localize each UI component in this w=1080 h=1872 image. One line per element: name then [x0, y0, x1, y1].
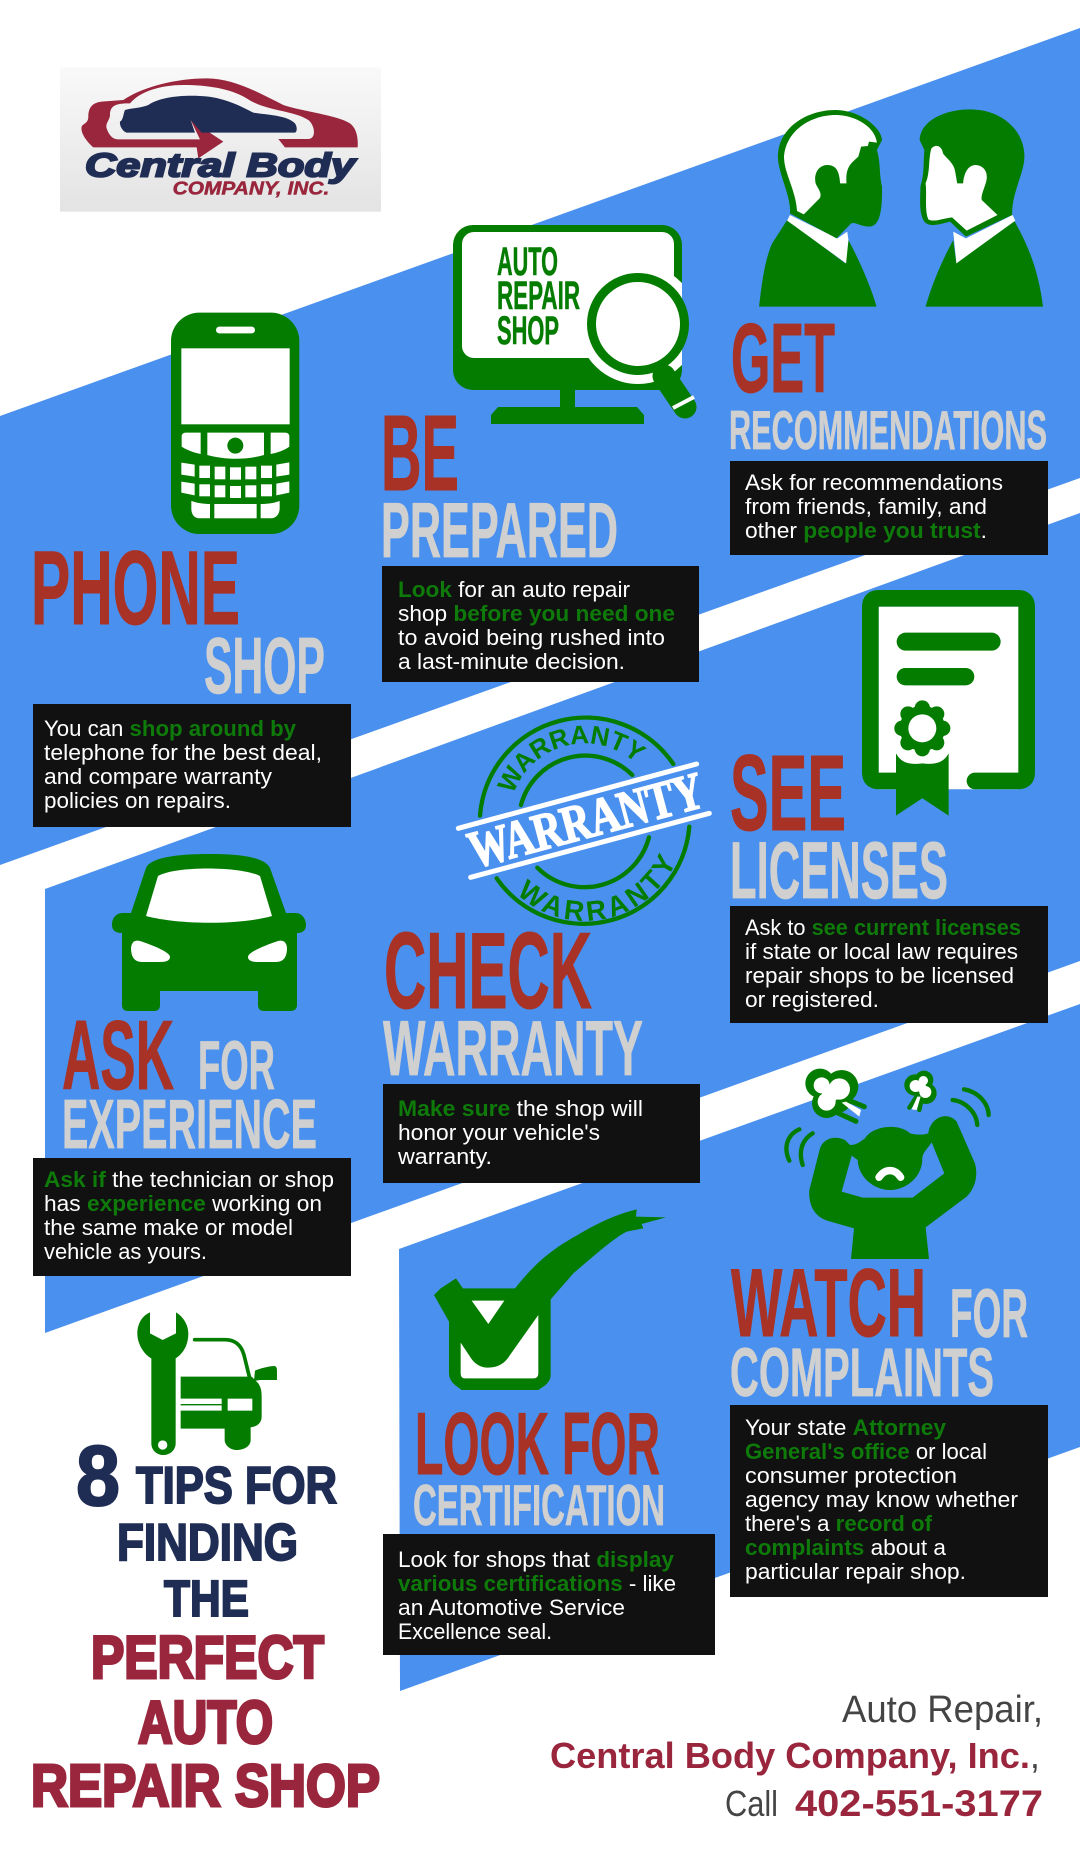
text box: Look for Certification	[383, 1534, 715, 1655]
contact footer	[550, 1689, 1043, 1824]
text box: Watch for Complaints: complaints about a	[745, 1535, 947, 1560]
heading: Ask for Experience: FOR	[198, 1027, 275, 1104]
heading: See Licenses: SEE	[730, 733, 846, 853]
heading: Check Warranty: WARRANTY	[383, 1004, 643, 1092]
text box: Watch for Complaints: General's office or local	[745, 1439, 987, 1464]
text box: Get Recommendations	[730, 461, 1048, 555]
text box: Phone Shop: policies on repairs.	[44, 788, 231, 813]
title: 8 tips for finding the perfect auto repair shop: REPAIR SHOP	[31, 1753, 380, 1819]
text box: Get Recommendations: from friends, family, and	[745, 494, 987, 519]
heading: See Licenses	[730, 733, 948, 916]
title: 8 tips for finding the perfect auto repair shop: TIPS FOR	[136, 1457, 337, 1515]
title: 8 tips for finding the perfect auto repair shop: THE	[164, 1570, 249, 1627]
text box: See Licenses: or registered.	[745, 987, 879, 1012]
title: 8 tips for finding the perfect auto repair shop: PERFECT	[91, 1624, 324, 1691]
heading: Look for Certification	[413, 1394, 665, 1538]
icon: check box	[434, 1209, 666, 1390]
icon: license certificate	[870, 598, 1027, 816]
text box: Ask for Experience: the same make or model	[44, 1215, 293, 1240]
text box: See Licenses: Ask to see current licenses	[745, 915, 1021, 940]
text box: Watch for Complaints: agency may know whether	[745, 1487, 1018, 1512]
title: 8 tips for finding the perfect auto repair shop: AUTO	[138, 1689, 273, 1756]
text box: Check Warranty: honor your vehicle's	[398, 1120, 600, 1145]
text box: Check Warranty: warranty.	[397, 1144, 492, 1169]
heading: Watch for Complaints: WATCH	[731, 1250, 926, 1357]
text box: Phone Shop	[33, 704, 351, 827]
text box: Be Prepared: to avoid being rushed into	[398, 625, 665, 650]
text box: Ask for Experience: has experience working on	[44, 1191, 322, 1216]
title: 8 tips for finding the perfect auto repair shop: 8	[76, 1429, 120, 1524]
contact footer: 402-551-3177	[795, 1783, 1043, 1824]
logo: Central Body Company	[60, 67, 381, 212]
text box: Get Recommendations: other people you trust .	[745, 518, 987, 543]
text box: Watch for Complaints: Your state Attorney	[745, 1415, 947, 1440]
heading: Ask for Experience	[62, 1000, 317, 1163]
contact footer: Call	[725, 1783, 778, 1824]
icon: wrench and car	[137, 1312, 277, 1455]
text box: Ask for Experience: vehicle as yours.	[44, 1239, 207, 1264]
text box: Phone Shop: and compare warranty	[44, 764, 272, 789]
text box: Check Warranty: Make sure the shop will	[398, 1096, 643, 1121]
icon: two people talking	[759, 109, 1043, 307]
logo: Central Body Company: COMPANY, INC.	[173, 177, 329, 198]
text box: See Licenses	[730, 906, 1048, 1023]
heading: Phone Shop: SHOP	[204, 621, 325, 710]
text box: Ask for Experience: Ask if the technician or shop	[44, 1167, 334, 1192]
icon: warranty stamp: WARRANTY	[462, 762, 710, 880]
title: 8 tips for finding the perfect auto repair shop	[31, 1429, 380, 1819]
heading: Ask for Experience: ASK	[62, 1000, 174, 1110]
text box: Check Warranty	[383, 1084, 700, 1183]
heading: Check Warranty: CHECK	[384, 910, 592, 1031]
icon: frustrated person	[786, 1069, 989, 1259]
heading: Phone Shop: PHONE	[31, 530, 240, 647]
text box: Ask for Experience	[33, 1158, 351, 1276]
icon: warranty stamp: WARRANTY	[496, 726, 647, 790]
contact footer: Central Body Company, Inc.,	[550, 1735, 1040, 1776]
text box: Watch for Complaints	[730, 1405, 1048, 1597]
heading: Phone Shop	[31, 530, 325, 710]
heading: Get Recommendations: GET	[731, 303, 835, 413]
logo: Central Body Company: Central Body	[85, 148, 357, 185]
text box: Be Prepared: Look for an auto repair	[398, 577, 630, 602]
text box: Phone Shop: You can shop around by	[44, 716, 297, 741]
heading: Be Prepared: PREPARED	[381, 486, 618, 574]
heading: Watch for Complaints	[730, 1250, 1028, 1411]
text box: Get Recommendations: Ask for recommendations	[745, 470, 1003, 495]
text box: See Licenses: repair shops to be licensed	[745, 963, 1014, 988]
icon: monitor with magnifier: REPAIR	[497, 274, 580, 318]
heading: Be Prepared: BE	[381, 393, 459, 513]
icon: warranty stamp	[456, 716, 712, 926]
icon: warranty stamp: WARRANTY	[520, 852, 673, 922]
text box: Look for Certification: Look for shops that display	[398, 1547, 675, 1572]
text box: Look for Certification: various certifications - like	[398, 1571, 676, 1596]
heading: Ask for Experience: EXPERIENCE	[62, 1085, 317, 1163]
text box: Be Prepared: shop before you need one	[398, 601, 675, 626]
text box: Look for Certification: an Automotive Service	[398, 1595, 625, 1620]
text box: Watch for Complaints: consumer protection	[745, 1463, 957, 1488]
text box: Phone Shop: telephone for the best deal,	[44, 740, 322, 765]
text box: Look for Certification: Excellence seal.	[398, 1619, 552, 1644]
icon: smartphone	[171, 313, 299, 534]
icon: monitor with magnifier: SHOP	[497, 309, 559, 353]
text box: Watch for Complaints: there's a record of	[745, 1511, 933, 1536]
text box: Be Prepared: a last-minute decision.	[398, 649, 625, 674]
icon: monitor with magnifier	[453, 225, 698, 424]
icon: monitor with magnifier: AUTO	[497, 240, 558, 284]
text box: Be Prepared	[382, 566, 699, 682]
heading: Look for Certification: LOOK FOR	[415, 1394, 660, 1493]
title: 8 tips for finding the perfect auto repair shop: FINDING	[117, 1514, 298, 1572]
heading: Be Prepared	[381, 393, 618, 574]
text box: See Licenses: if state or local law requires	[745, 939, 1018, 964]
heading: Look for Certification: CERTIFICATION	[413, 1474, 665, 1538]
heading: Get Recommendations	[729, 303, 1047, 461]
text box: Watch for Complaints: particular repair shop.	[745, 1559, 966, 1584]
contact footer: Auto Repair,	[842, 1689, 1043, 1731]
heading: Check Warranty	[383, 910, 643, 1092]
icon: car front	[112, 854, 306, 1011]
